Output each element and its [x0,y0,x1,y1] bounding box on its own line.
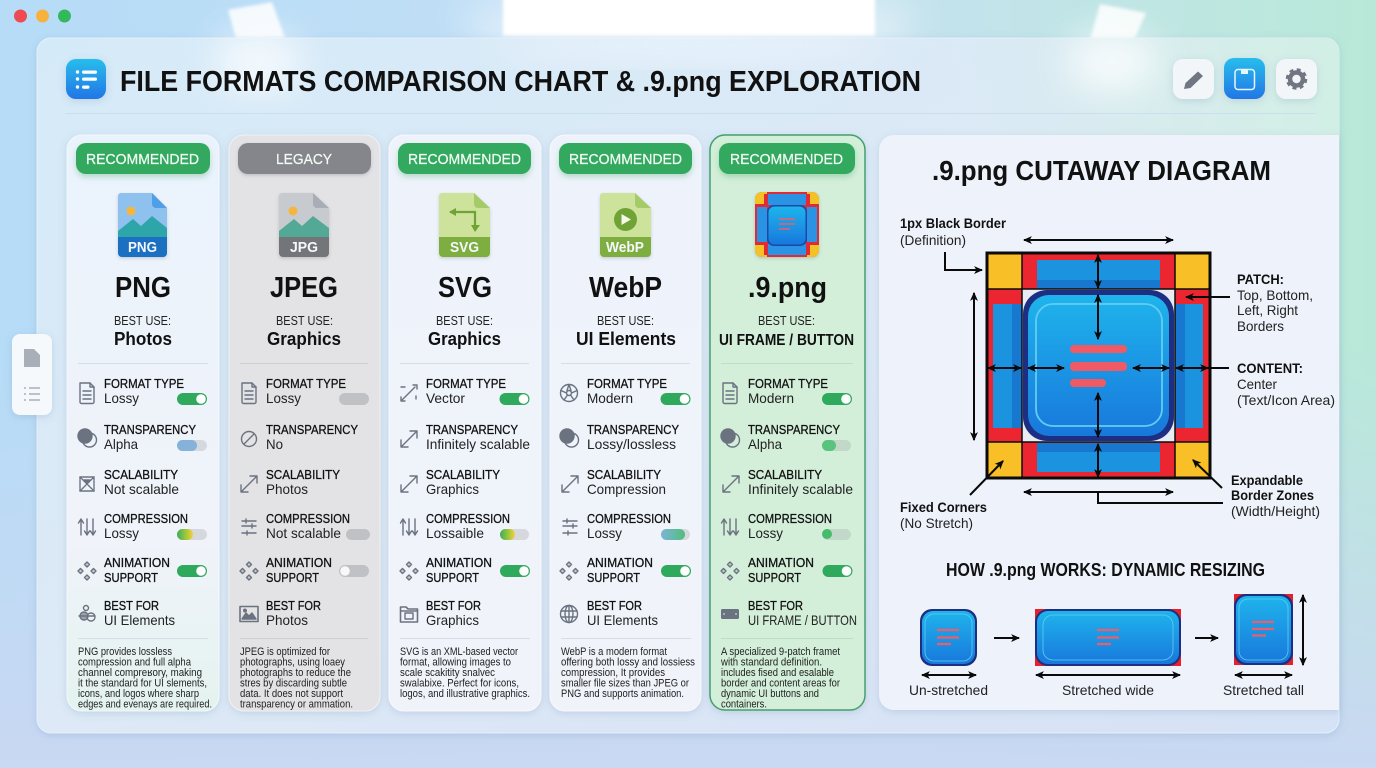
row: scalability [241,467,340,497]
card: JPEG [229,135,380,711]
row: compression: Lossaible [426,525,484,541]
description: PNG and supports animation. [561,688,684,700]
example: stretched tall [1223,594,1304,698]
icon: SVG file: SVG [450,240,479,256]
badge: recommended [76,143,210,174]
callout: fixed corners: (No Stretch) [900,515,973,531]
description: swalabixe. Perfect for icons, [400,678,519,690]
callout: patch [1237,271,1313,334]
description: smaller file sizes than JPEG or [561,678,689,690]
row: transparency: Alpha [748,436,782,452]
row: scalability [723,467,853,497]
row: transparency: TRANSPARENCY [104,422,196,437]
arrow: to wide [994,637,1019,639]
row: format type: FORMAT TYPE [748,376,828,391]
diagram heading: .9.png CUTAWAY DIAGRAM [932,155,1271,186]
example: un-stretched: Un-stretched [909,682,988,698]
black grid [986,252,1211,479]
row: transparency [560,422,679,452]
description: JPEG is optimized for [240,646,330,658]
description: dynamic UI buttons and [721,688,819,700]
description [561,646,695,700]
row: animation: ANIMATION [587,555,653,570]
row: animation: SUPPORT [104,570,158,585]
row: animation: ANIMATION [426,555,492,570]
row: best for: Photos [266,612,308,628]
callout: fixed corners [900,499,987,531]
ceiling light beams [228,0,1146,50]
row: best for: BEST FOR [266,598,321,613]
row: animation [721,555,852,585]
description [78,646,212,710]
badge: recommended [719,143,855,174]
row: scalability: SCALABILITY [266,467,340,482]
title: FILE FORMATS COMPARISON CHART & .9.png EXPLORATION [120,66,921,98]
row: transparency: No [266,436,283,452]
badge: recommended [398,143,531,174]
row: format type [401,376,530,406]
row: transparency [242,422,358,452]
row: scalability [80,467,179,497]
format name: PNG [115,272,171,304]
row: best for: Graphics [426,612,479,628]
dynamic resizing heading: HOW .9.png WORKS: DYNAMIC RESIZING [946,560,1265,580]
best use: BEST USE: [114,314,171,328]
card: .9.png highlighted [710,135,865,710]
row: format type: FORMAT TYPE [266,376,346,391]
row: compression: COMPRESSION [426,511,510,526]
badge: legacy [238,143,371,174]
row: compression: COMPRESSION [266,511,350,526]
badge: recommended [559,143,692,174]
best use: Graphics [428,329,501,349]
row: animation [240,555,369,585]
callout: patch: PATCH: [1237,271,1284,287]
row: animation [400,555,530,585]
row: best for [400,598,481,628]
row: scalability: SCALABILITY [587,467,661,482]
example: stretched wide [1035,609,1181,698]
row: scalability [401,467,500,497]
callout: patch: Left, Right [1237,302,1298,318]
icon: JPG file [279,193,329,257]
row: transparency: TRANSPARENCY [587,422,679,437]
format name: SVG [438,272,492,304]
row: best for: UI FRAME / BUTTON [748,612,857,628]
description: with standard definition. [720,656,822,668]
row: compression [722,511,851,541]
example: un-stretched [909,609,988,698]
description: PNG provides lossless [78,646,172,658]
callout: expandable border zones: Expandable [1231,472,1303,488]
row: animation: ANIMATION [104,555,170,570]
row: scalability: Compression [587,481,666,497]
badge: legacy: LEGACY [276,151,332,168]
row: compression: Lossy [748,525,783,541]
row: compression [242,511,370,541]
row: animation [78,555,207,585]
callout: content [1237,360,1335,408]
toolbar buttons [1173,58,1317,99]
row: scalability: Infinitely scalable [748,481,853,497]
description: scale scakitity snalvec [400,667,495,679]
row: animation: SUPPORT [426,570,479,585]
description: format, allowing images to [400,656,511,668]
best use: BEST USE: [436,314,493,328]
row: transparency [721,422,851,452]
best use [576,314,676,349]
description: photographs, using loaey [240,656,345,668]
left sidebar [12,334,52,415]
description: edges and evenays are required. [78,698,212,710]
best use: BEST USE: [276,314,333,328]
fixed corners [986,252,1211,479]
badge: recommended: RECOMMENDED [730,151,843,168]
sidebar file icon [24,349,40,367]
example: stretched wide: Stretched wide [1062,682,1154,698]
callout: expandable border zones [1231,472,1320,519]
panel: cutaway diagram [879,135,1339,710]
best use [267,314,341,349]
row: format type: Lossy [104,390,139,406]
row: best for: BEST FOR [426,598,481,613]
description: WebP is a modern format [561,646,667,658]
description: includes fised and esalable [721,667,834,679]
row: transparency: Infinitely scalable [426,436,530,452]
row: compression: COMPRESSION [587,511,671,526]
description: compression and full alpha [78,656,192,668]
button: settings [1276,59,1317,99]
best use [114,314,172,349]
best use: Graphics [267,329,341,349]
row: scalability: SCALABILITY [104,467,178,482]
best use: BEST USE: [758,314,815,328]
row: transparency: TRANSPARENCY [266,422,358,437]
description: logos, and illustrative graphics. [400,688,530,700]
row: animation: SUPPORT [266,570,319,585]
row: best for: UI Elements [587,612,658,628]
callout: 1px black border [900,215,1006,248]
row: format type: FORMAT TYPE [426,376,506,391]
row: compression: COMPRESSION [104,511,188,526]
row: compression [400,511,529,541]
badge: recommended: RECOMMENDED [569,151,682,168]
row: format type: Lossy [266,390,301,406]
callout: expandable border zones: Border Zones [1231,487,1314,503]
best use [719,314,854,349]
callout: content: (Text/Icon Area) [1237,392,1335,408]
best use: UI Elements [576,329,676,349]
callout: fixed corners: Fixed Corners [900,499,987,515]
row: compression: Not scalable [266,525,341,541]
description: compression, It provides [561,667,665,679]
callout: content: Center [1237,376,1277,392]
row: transparency: TRANSPARENCY [748,422,840,437]
row: compression: Lossy [104,525,139,541]
description: border and content areas for [721,678,840,690]
row: compression: Lossy [587,525,622,541]
description: offering both lossy and lossiess [561,656,695,668]
icon: WebP file [600,193,651,257]
row: best for: UI Elements [104,612,175,628]
description: photographs to reduce the [240,667,351,679]
row: scalability: Not scalable [104,481,179,497]
icon: WebP file: WebP [606,240,644,256]
row: format type [80,376,207,406]
card: PNG [67,135,219,711]
best use: UI FRAME / BUTTON [719,332,854,349]
description: SVG is an XML-based vector [400,646,518,658]
button: edit [1173,59,1214,99]
row: scalability: Photos [266,481,308,497]
card: WebP [550,135,701,711]
row: transparency: TRANSPARENCY [426,422,518,437]
callout: patch: Top, Bottom, [1237,287,1313,303]
row: scalability: SCALABILITY [426,467,500,482]
row: compression [563,511,690,541]
row: animation: SUPPORT [748,570,801,585]
row: transparency [78,422,207,452]
callout: 1px black border: (Definition) [900,232,966,248]
row: format type [723,376,852,406]
description: containers. [721,698,767,710]
row: best for: BEST FOR [587,598,642,613]
row: animation: SUPPORT [587,570,640,585]
row: compression [78,511,207,541]
description: data. It does not support [240,688,343,700]
row: format type [560,376,690,406]
description [240,646,353,710]
callout: 1px black border: 1px Black Border [900,215,1006,231]
row: animation [560,555,691,585]
description [400,646,530,700]
card: SVG [389,135,541,711]
badge: recommended: RECOMMENDED [408,151,521,168]
row: format type [242,376,369,406]
row: scalability: Graphics [426,481,479,497]
callout: patch: Borders [1237,318,1284,334]
description: it the standard for UI slements, [78,678,207,690]
top and bottom patches [1037,260,1160,472]
icon: PNG file [118,193,167,257]
row: best for [721,598,857,628]
row: format type: Modern [587,390,633,406]
arrow: to tall [1195,637,1218,639]
format name: JPEG [270,272,338,304]
button: save active [1224,58,1265,99]
description: A specialized 9-patch framet [721,646,840,658]
callout: content: CONTENT: [1237,360,1303,376]
row: format type: Modern [748,390,794,406]
description: stres by discarding subtle [240,678,347,690]
row: best for [79,598,175,628]
row: animation: ANIMATION [266,555,332,570]
sidebar list icon [24,388,40,400]
row: transparency: Alpha [104,436,138,452]
row: scalability: SCALABILITY [748,467,822,482]
row: best for [560,598,658,628]
icon: 9-patch tile [755,192,819,257]
icon: JPG file: JPG [290,240,318,256]
header app icon [66,59,106,99]
description: transparency or ammation. [240,698,353,710]
callout leader lines [945,252,1230,503]
example: stretched tall: Stretched tall [1223,682,1304,698]
best use: BEST USE: [597,314,654,328]
window traffic light controls [14,10,71,22]
row: format type: FORMAT TYPE [104,376,184,391]
best use: Photos [114,329,172,349]
row: format type: FORMAT TYPE [587,376,667,391]
callout: expandable border zones: (Width/Height) [1231,503,1320,519]
format name: .9.png [748,272,827,304]
9-patch cutaway graphic [986,252,1211,479]
row: format type: Vector [426,390,465,406]
row: compression: COMPRESSION [748,511,832,526]
icon: SVG file [439,193,490,257]
description [720,646,840,710]
badge: recommended: RECOMMENDED [86,151,199,168]
row: transparency: Lossy/lossless [587,436,676,452]
row: best for: BEST FOR [104,598,159,613]
icon: PNG file: PNG [128,240,157,256]
format name: WebP [589,272,662,304]
content area [1022,289,1175,442]
row: scalability [562,467,666,497]
description: channel compreʁory, making [78,667,202,679]
row: transparency [401,422,530,452]
row: best for [240,598,321,628]
stretch arrows [974,240,1208,492]
left and right patches [993,304,1203,428]
best use [428,314,501,349]
row: best for: BEST FOR [748,598,803,613]
row: animation: ANIMATION [748,555,814,570]
description: icons, and logos where sharp [78,688,199,700]
